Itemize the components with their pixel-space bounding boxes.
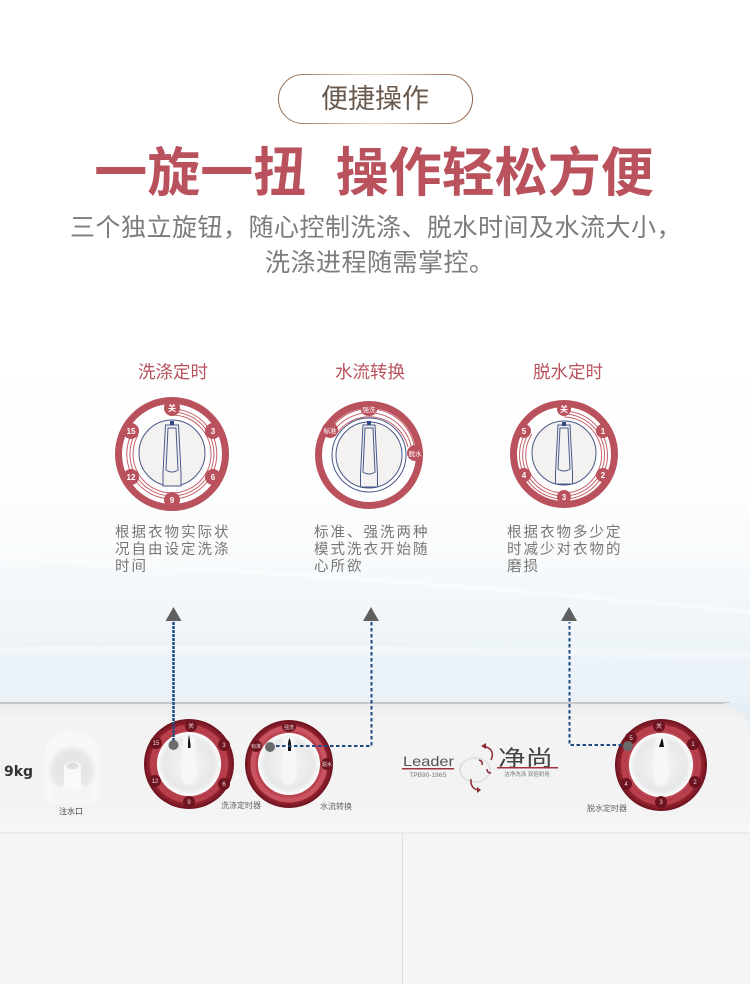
badge: 便捷操作 (278, 74, 472, 124)
knob captions (221, 800, 627, 813)
knob: water flow: 标准 (251, 743, 261, 750)
knob captions: 水流转换 (320, 801, 352, 811)
icon: water flow dial diagram (318, 404, 423, 506)
column headings (138, 362, 603, 382)
arrow: wash timer pointer (166, 607, 182, 750)
knob: water flow: 强洗 (284, 724, 294, 731)
icon: spin timer dial diagram (514, 402, 614, 504)
knob captions: 洗涤定时器 (221, 800, 261, 810)
knob: wash timer: 关 (188, 722, 194, 730)
knob: wash timer: 9 (187, 800, 191, 806)
column headings: 水流转换 (335, 362, 405, 382)
washer lower body (0, 832, 750, 984)
descriptions: 时减少对衣物的 (507, 541, 622, 558)
descriptions: 磨损 (507, 558, 540, 575)
knob: spin timer: 2 (693, 780, 697, 786)
icon: water flow dial diagram: 标准 (324, 426, 337, 435)
icon: spin timer dial diagram: 2 (601, 471, 606, 480)
capacity label: 9kg (4, 764, 33, 780)
subtitle: 三个独立旋钮，随心控制洗涤、脱水时间及水流大小， (70, 214, 682, 242)
title: 一旋一扭 操作轻松方便 (94, 144, 654, 203)
knob: spin timer: 1 (691, 742, 695, 748)
water inlet (44, 731, 100, 816)
icon: wash timer dial diagram: 9 (170, 496, 175, 505)
knob: spin timer: 3 (659, 800, 663, 806)
descriptions: 心所欲 (314, 558, 364, 575)
icon: wash timer dial diagram: 6 (211, 473, 216, 482)
knob: spin timer: 5 (629, 736, 633, 742)
badge: 便捷操作: 便捷操作 (321, 84, 429, 114)
brand logo: 净尚 (498, 746, 553, 771)
icon: wash timer dial diagram (118, 400, 226, 508)
icon: water flow dial diagram: 强洗 (362, 405, 376, 414)
water inlet: 注水口 (59, 806, 83, 816)
brand logo: Leader (403, 753, 454, 769)
descriptions: 时间 (115, 558, 148, 575)
icon: spin timer dial diagram: 5 (522, 427, 527, 436)
descriptions (115, 524, 622, 575)
washer control panel (0, 702, 750, 833)
knob captions: 脱水定时器 (587, 803, 627, 813)
icon: spin timer dial diagram: 4 (522, 471, 527, 480)
descriptions: 根据衣物多少定 (507, 524, 622, 541)
icon: water flow dial diagram: 脱水 (408, 449, 422, 458)
knob: water flow: 脱水 (322, 761, 332, 768)
icon: spin timer dial diagram: 3 (562, 493, 567, 502)
descriptions: 模式洗衣开始随 (314, 541, 430, 558)
knob: wash timer: 3 (222, 743, 226, 749)
subtitle (70, 214, 682, 277)
icon: wash timer dial diagram: 15 (127, 427, 136, 436)
knob: wash timer (144, 719, 234, 809)
knob: water flow (245, 720, 333, 808)
icon: wash timer dial diagram: 12 (127, 473, 136, 482)
icon: spin timer dial diagram: 1 (601, 427, 606, 436)
knob: wash timer: 15 (153, 741, 160, 747)
arrow: spin timer pointer (561, 607, 633, 751)
icon: wash timer dial diagram: 3 (211, 427, 216, 436)
descriptions: 标准、强洗两种 (314, 524, 430, 541)
knob: wash timer: 12 (152, 779, 159, 785)
column headings: 洗涤定时 (138, 362, 208, 382)
brand logo: 洁净洗涤 双倍耐用 (504, 770, 550, 778)
knob: spin timer: 关 (656, 722, 662, 730)
knob: spin timer (615, 719, 707, 811)
descriptions: 况自由设定洗涤 (115, 541, 230, 558)
subtitle: 洗涤进程随需掌控。 (265, 249, 495, 277)
brand logo (402, 743, 558, 793)
brand logo: TPB90-196S (409, 772, 447, 779)
column headings: 脱水定时 (533, 362, 603, 382)
arrow: water flow pointer (265, 607, 379, 752)
icon: wash timer dial diagram: 关 (168, 403, 176, 413)
knob: wash timer: 6 (222, 782, 226, 788)
icon: spin timer dial diagram: 关 (560, 404, 568, 414)
knob: spin timer: 4 (624, 782, 628, 788)
descriptions: 根据衣物实际状 (115, 524, 230, 541)
background: fabric waves (0, 0, 750, 710)
